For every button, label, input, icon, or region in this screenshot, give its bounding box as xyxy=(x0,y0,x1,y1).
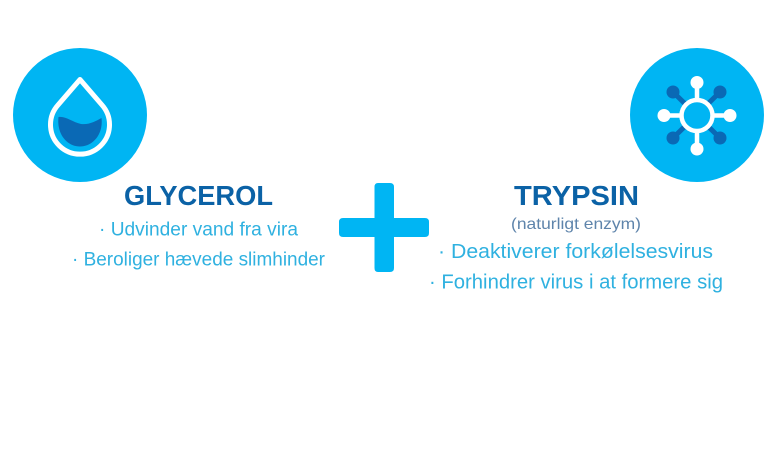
text: Trypsin benefit 2: · Forhindrer virus i at formere sig xyxy=(429,272,723,294)
icon: virus xyxy=(630,48,764,182)
icon: water drop xyxy=(13,48,147,182)
heading: Glycerol: GLYCEROL xyxy=(124,180,273,211)
text: Glycerol benefit 1: · Udvinder vand fra vira xyxy=(99,220,298,240)
text: Trypsin benefit 1: · Deaktiverer forkølelsesvirus xyxy=(438,240,713,263)
text: Glycerol benefit 2: · Beroliger hævede slimhinder xyxy=(72,250,326,270)
text: natural enzyme note: (naturligt enzym) xyxy=(511,216,641,233)
icon: plus xyxy=(339,183,429,272)
heading: Trypsin: TRYPSIN xyxy=(514,180,639,211)
